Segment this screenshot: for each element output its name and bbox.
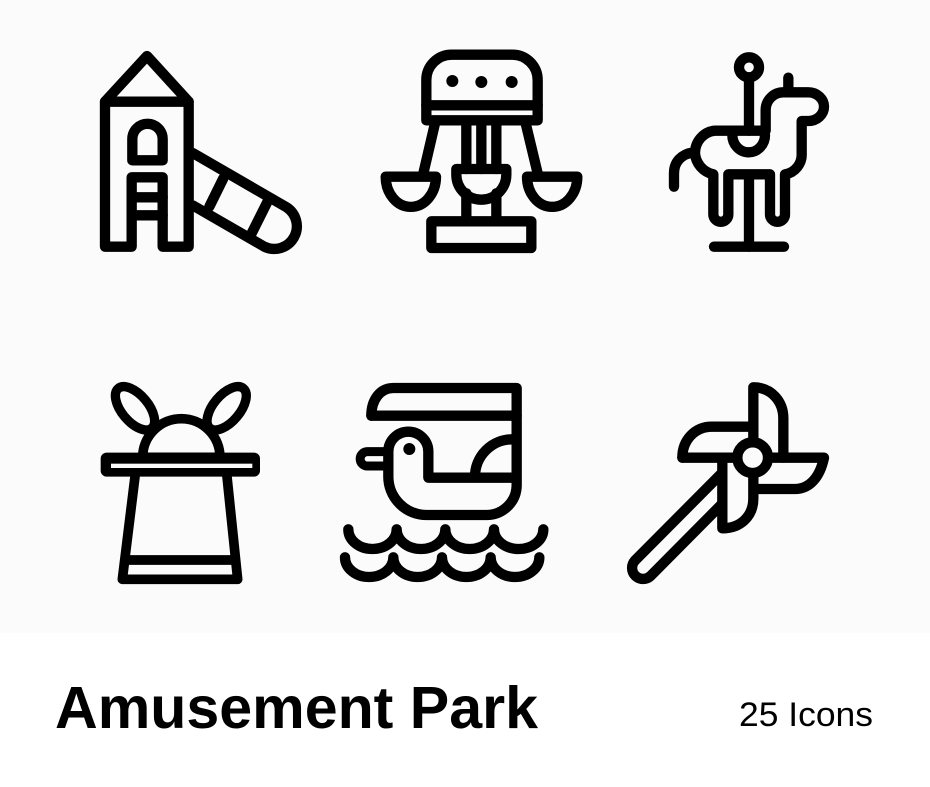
icon: swing carousel ride <box>386 55 577 248</box>
icon: pinwheel <box>632 387 824 579</box>
icon: playground slide tower <box>105 56 297 249</box>
icon: carousel horse <box>674 57 824 247</box>
hat brim <box>101 453 260 477</box>
icon: swan boat on waves <box>345 388 543 577</box>
icon count label: 25 Icons <box>739 696 873 734</box>
title: Amusement Park <box>55 675 538 741</box>
hat body <box>122 477 238 579</box>
icon: magic hat with rabbit <box>101 380 260 579</box>
rabbit ears <box>108 380 254 437</box>
rabbit head <box>143 419 220 457</box>
